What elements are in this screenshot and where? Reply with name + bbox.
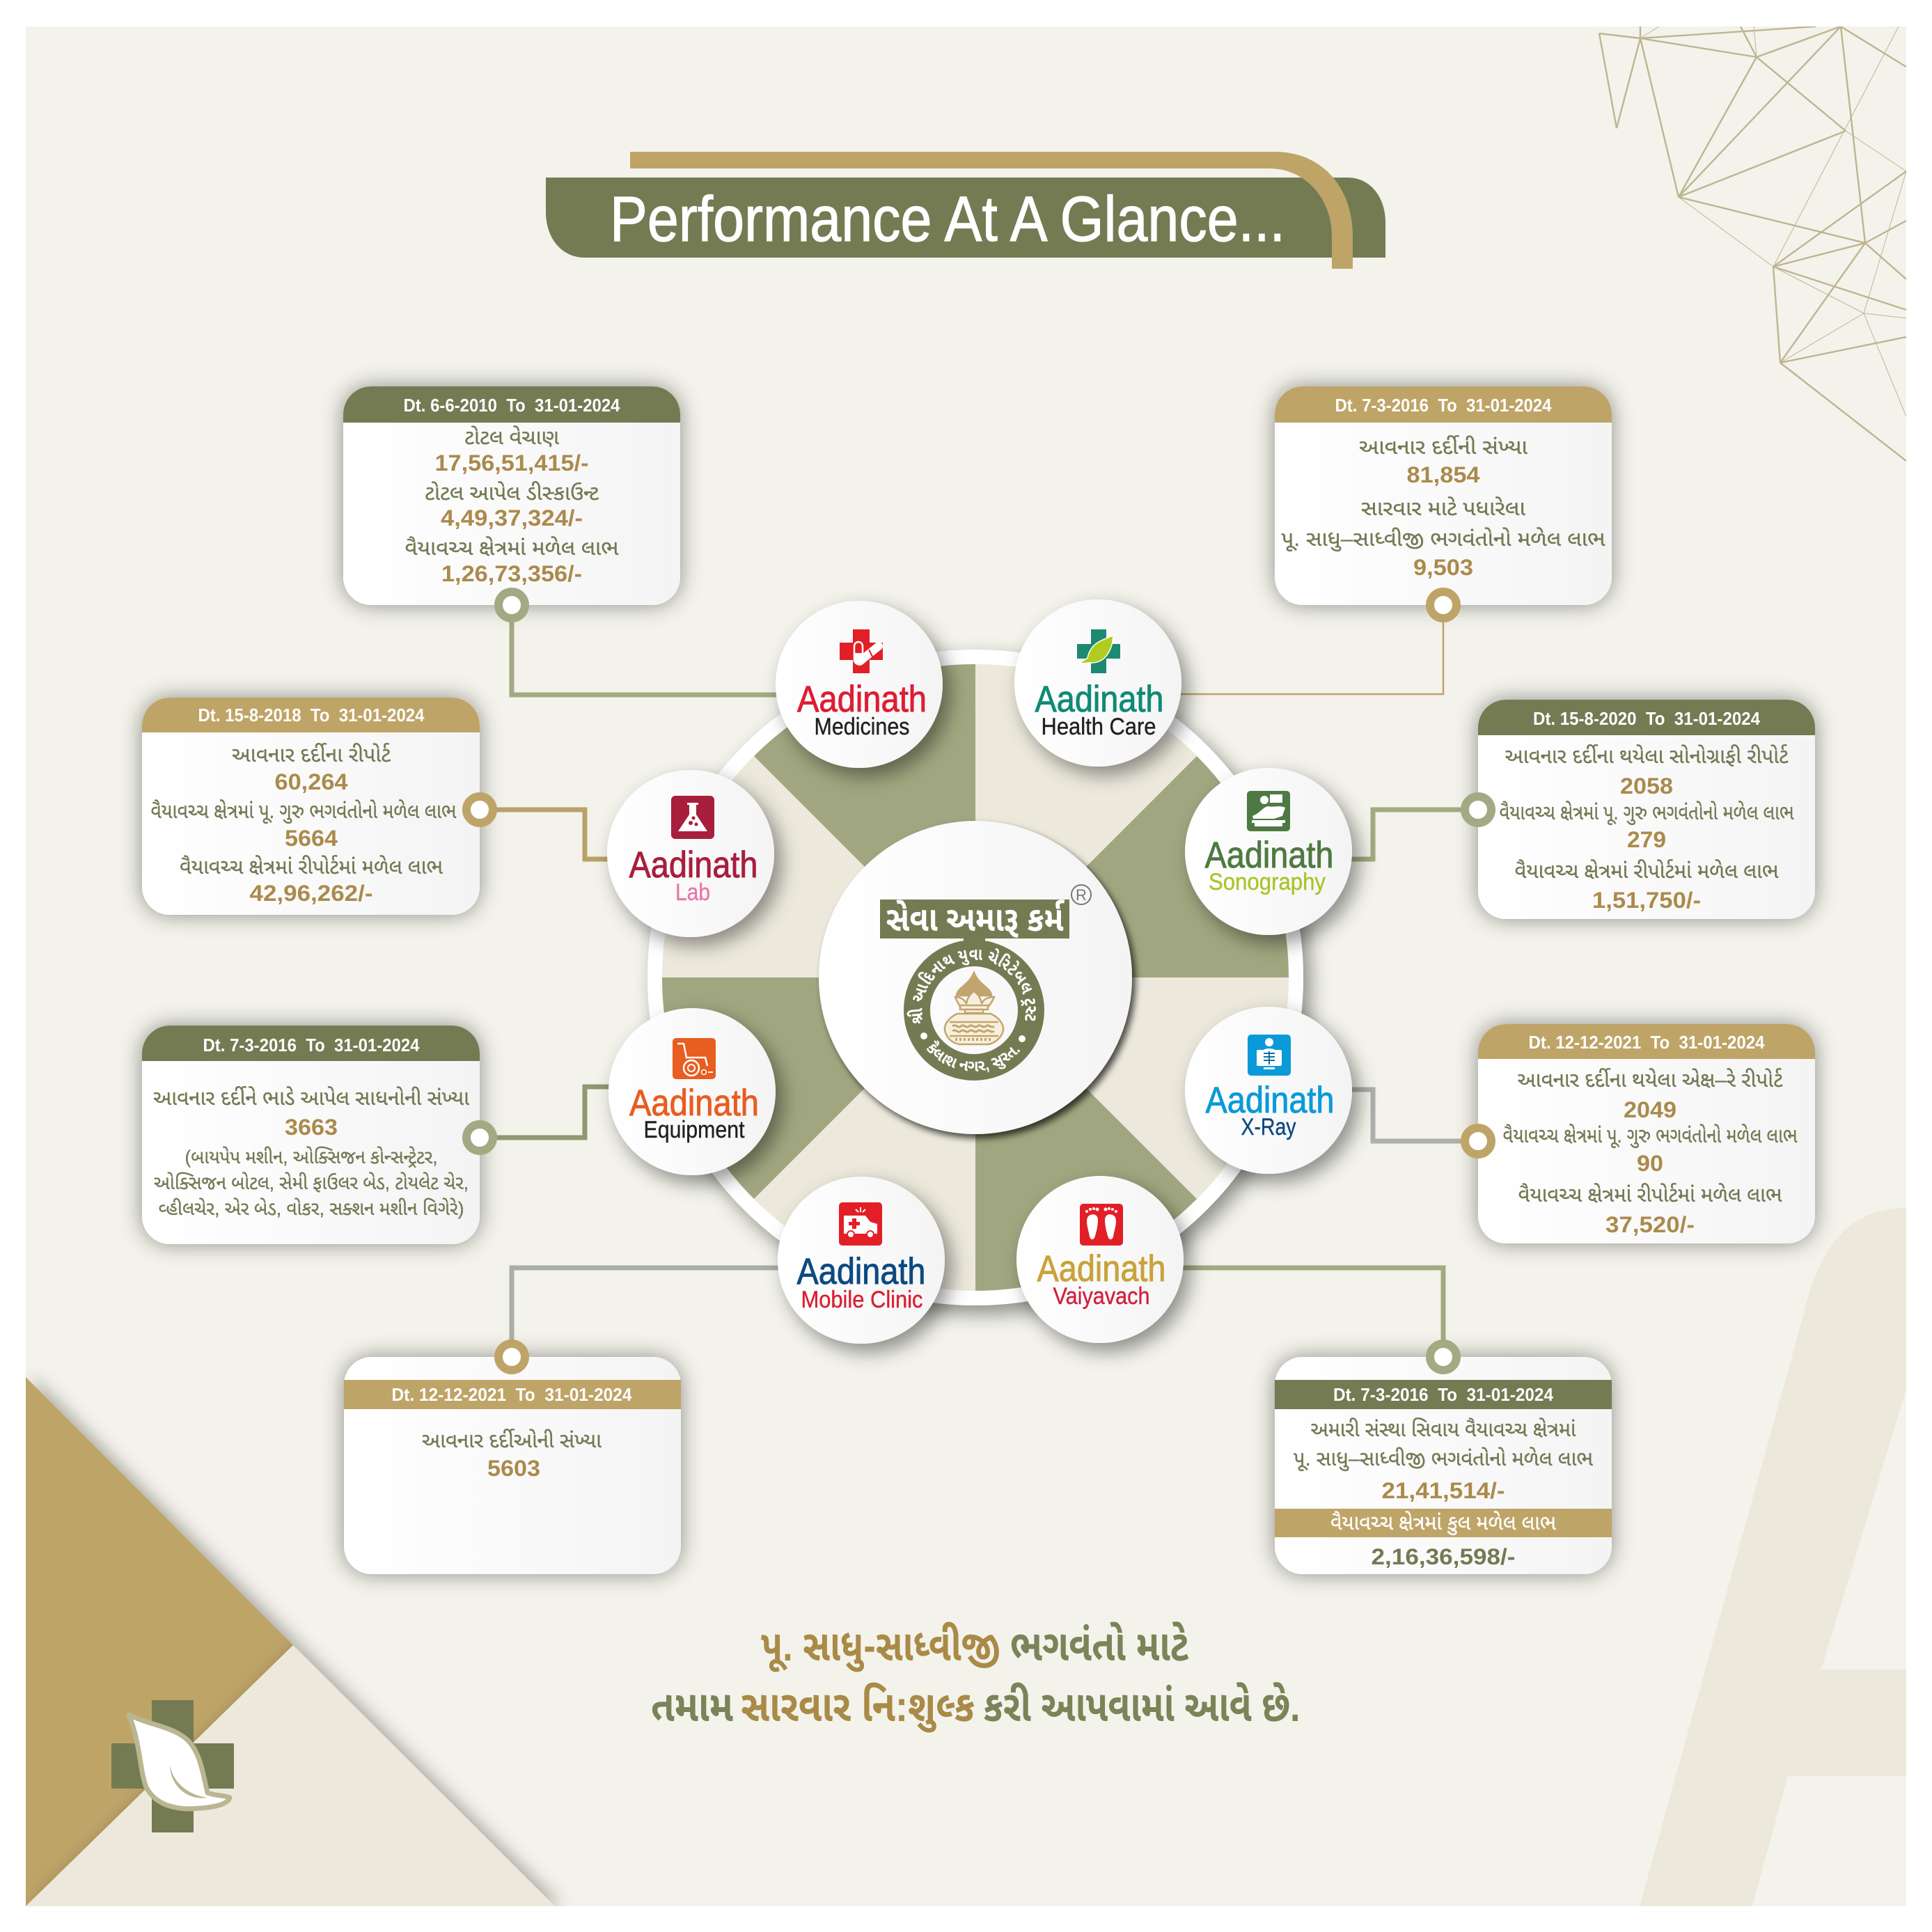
card: Equipment stats: આવનાર દર્દીને ભાડે આપેલ સાધનોની સંખ્યા [153,1085,469,1110]
card: Lab stats: Dt. 15-8-2018 To 31-01-2024 [198,705,425,725]
card: Medicines stats: ટોટલ આપેલ ડીસ્કાઉન્ટ [425,480,599,505]
icon: medicine cross [840,629,883,673]
card: Health Care stats: Dt. 7-3-2016 To 31-01-2024 [1335,395,1552,416]
card: Equipment stats [142,1026,493,1244]
card: Medicines stats: 17,56,51,415/- [434,450,589,476]
decorative geometric lines [1599,26,1906,461]
footer message: સારવાર નિ:શુલ્ક [741,1682,975,1733]
node: Aadinath Equipment [608,1008,776,1175]
card: Equipment stats: Dt. 7-3-2016 To 31-01-2024 [203,1035,420,1055]
node: Aadinath Sonography [1185,768,1352,935]
icon: ambulance [839,1202,882,1246]
node: Aadinath Medicines: Medicines [815,714,909,740]
node: Aadinath Lab: Aadinath [629,845,757,886]
decorative large letter A [1640,1208,1906,1906]
node: Aadinath Equipment: Aadinath [629,1083,759,1124]
card: Sonography stats: 279 [1627,827,1666,852]
card: Lab stats [142,698,493,915]
central logo circle [817,820,1140,1143]
title banner [546,152,1385,269]
icon: x-ray [1248,1035,1291,1076]
card: Health Care stats: પૂ. સાધુ–સાધ્વીજી ભગવંતોનો મળેલ લાભ [1281,526,1605,551]
card: Equipment stats: 3663 [285,1115,338,1140]
card: Sonography stats: 1,51,750/- [1592,888,1701,913]
logo ring: શ્રી આદિનાથ યુવા ચેરિટેબલ ટ્રસ્ટ [906,948,1036,1023]
node: Aadinath Sonography: Sonography [1209,869,1326,895]
card: Vaiyavach stats: પૂ. સાધુ–સાધ્વીજી ભગવંતોનો મળેલ લાભ [1294,1446,1594,1471]
card: Lab stats: 60,264 [274,769,348,794]
node: Aadinath X-Ray: Aadinath [1206,1080,1334,1121]
card: X-Ray stats: આવનાર દર્દીના થયેલા એક્ષ–રે રીપોર્ટ [1518,1067,1783,1092]
card: Medicines stats [343,386,680,618]
card: Sonography stats: વૈયાવચ્ચ ક્ષેત્રમાં રીપોર્ટમાં મળેલ લાભ [1515,858,1779,883]
node: Aadinath Lab: Lab [675,879,710,906]
node: Aadinath Mobile Clinic [778,1177,945,1344]
title banner: Performance At A Glance... [610,184,1285,255]
card: Lab stats: 5664 [285,826,338,851]
card: Equipment stats: વ્હીલચેર, એર બેડ, વોકર, સક્શન મશીન વિગેરે) [159,1197,464,1219]
node: Aadinath Vaiyavach [1016,1176,1184,1343]
node: Aadinath X-Ray [1185,1007,1352,1174]
card: Lab stats: 42,96,262/- [249,881,373,906]
node: Aadinath Equipment: Equipment [643,1117,745,1143]
node: Aadinath Mobile Clinic: Aadinath [796,1251,926,1292]
logo ring [904,941,1044,1081]
registered mark [1071,885,1091,904]
card: Lab stats: વૈયાવચ્ચ ક્ષેત્રમાં પૂ. ગુરુ ભગવંતોનો મળેલ લાભ [150,799,457,824]
card: Mobile Clinic stats [344,1344,681,1574]
card: Health Care stats: આવનાર દર્દીની સંખ્યા [1359,435,1527,459]
card: Health Care stats: 81,854 [1406,462,1480,487]
icon: health cross with leaf [1077,629,1120,673]
card: Medicines stats: 4,49,37,324/- [441,505,583,531]
card: Vaiyavach stats: વૈયાવચ્ચ ક્ષેત્રમાં કુલ મળેલ લાભ [1330,1510,1557,1535]
node: Aadinath Mobile Clinic: Mobile Clinic [801,1287,923,1313]
node: Aadinath Vaiyavach: Aadinath [1037,1248,1165,1289]
node: Aadinath Vaiyavach: Vaiyavach [1053,1283,1150,1310]
card: Medicines stats: Dt. 6-6-2010 To 31-01-2024 [404,395,620,416]
node: Aadinath Health Care: Health Care [1042,714,1156,740]
card: X-Ray stats: વૈયાવચ્ચ ક્ષેત્રમાં પૂ. ગુરુ ભગવંતોનો મળેલ લાભ [1502,1123,1798,1148]
card: Lab stats: આવનાર દર્દીના રીપોર્ટ [232,743,391,767]
card: Medicines stats: 1,26,73,356/- [441,561,582,586]
footer message: ભગવંતો માટે [1010,1621,1189,1670]
card: Mobile Clinic stats: 5603 [487,1456,540,1481]
card: Vaiyavach stats: 21,41,514/- [1381,1478,1505,1503]
card: Equipment stats: ઓક્સિજન બોટલ, સેમી ફાઉલર બેડ, ટોયલેટ ચેર, [154,1172,469,1193]
card: X-Ray stats: Dt. 12-12-2021 To 31-01-2024 [1529,1032,1765,1053]
logo ring: કૈલાશ નગર, સુરત. [926,1040,1021,1072]
card: Mobile Clinic stats: આવનાર દર્દીઓની સંખ્યા [422,1429,602,1452]
icon: wheelchair [673,1038,716,1079]
footer message [651,1621,1301,1733]
card: Health Care stats [1275,386,1612,618]
card: Vaiyavach stats: Dt. 7-3-2016 To 31-01-2024 [1333,1384,1554,1405]
card: Health Care stats: 9,503 [1413,555,1473,580]
card: Sonography stats [1465,700,1815,919]
card: Sonography stats: આવનાર દર્દીના થયેલા સોનોગ્રાફી રીપોર્ટ [1505,744,1789,768]
card: Sonography stats: વૈયાવચ્ચ ક્ષેત્રમાં પૂ. ગુરુ ભગવંતોનો મળેલ લાભ [1500,800,1794,825]
icon: kalash pot [945,973,1003,1044]
card: Vaiyavach stats: 2,16,36,598/- [1372,1544,1515,1569]
footer message: તમામ [651,1683,733,1731]
card: Equipment stats: (બાયપેપ મશીન, ઓક્સિજન કોન્સન્ટ્રેટર, [185,1146,437,1168]
card: Mobile Clinic stats: Dt. 12-12-2021 To 31-01-2024 [391,1384,632,1405]
footer message: પૂ. સાધુ-સાધ્વીજી [761,1621,1000,1672]
registered mark: R [1076,886,1087,904]
card: Medicines stats: વૈયાવચ્ચ ક્ષેત્રમાં મળેલ લાભ [405,535,619,560]
node: Aadinath X-Ray: X-Ray [1241,1114,1296,1140]
icon: footprints [1080,1204,1123,1246]
node: Aadinath Sonography: Aadinath [1204,835,1334,876]
central wheel [647,650,1303,1305]
node: Aadinath Medicines: Aadinath [797,679,927,720]
icon: lab flask [671,796,714,839]
card: Health Care stats: સારવાર માટે પધારેલા [1361,496,1525,520]
card: Vaiyavach stats: અમારી સંસ્થા સિવાય વૈયાવચ્ચ ક્ષેત્રમાં [1310,1417,1576,1441]
card: Lab stats: વૈયાવચ્ચ ક્ષેત્રમાં રીપોર્ટમાં મળેલ લાભ [180,854,443,879]
node: Aadinath Medicines [776,601,943,768]
card: X-Ray stats [1465,1024,1815,1243]
card: Sonography stats: Dt. 15-8-2020 To 31-01-2024 [1533,708,1760,729]
card: Medicines stats: ટોટલ વેચાણ [464,425,559,449]
card: X-Ray stats: વૈયાવચ્ચ ક્ષેત્રમાં રીપોર્ટમાં મળેલ લાભ [1518,1182,1782,1207]
card: Sonography stats: 2058 [1620,773,1673,799]
card: Vaiyavach stats [1275,1344,1612,1574]
logo banner: સેવા અમારૂ કર્મ [886,900,1065,938]
card: X-Ray stats: 37,520/- [1605,1212,1695,1237]
node: Aadinath Lab [607,770,774,937]
icon: cross and leaf logo [111,1700,234,1832]
icon: sonography [1247,791,1290,831]
node: Aadinath Health Care [1014,599,1181,767]
card: X-Ray stats: 90 [1637,1151,1663,1176]
node: Aadinath Health Care: Aadinath [1035,679,1164,720]
card: X-Ray stats: 2049 [1624,1097,1676,1122]
decorative corner triangles [26,1377,555,1906]
footer message: કરી આપવામાં આવે છે. [983,1682,1301,1731]
connector lines [480,620,1478,1357]
